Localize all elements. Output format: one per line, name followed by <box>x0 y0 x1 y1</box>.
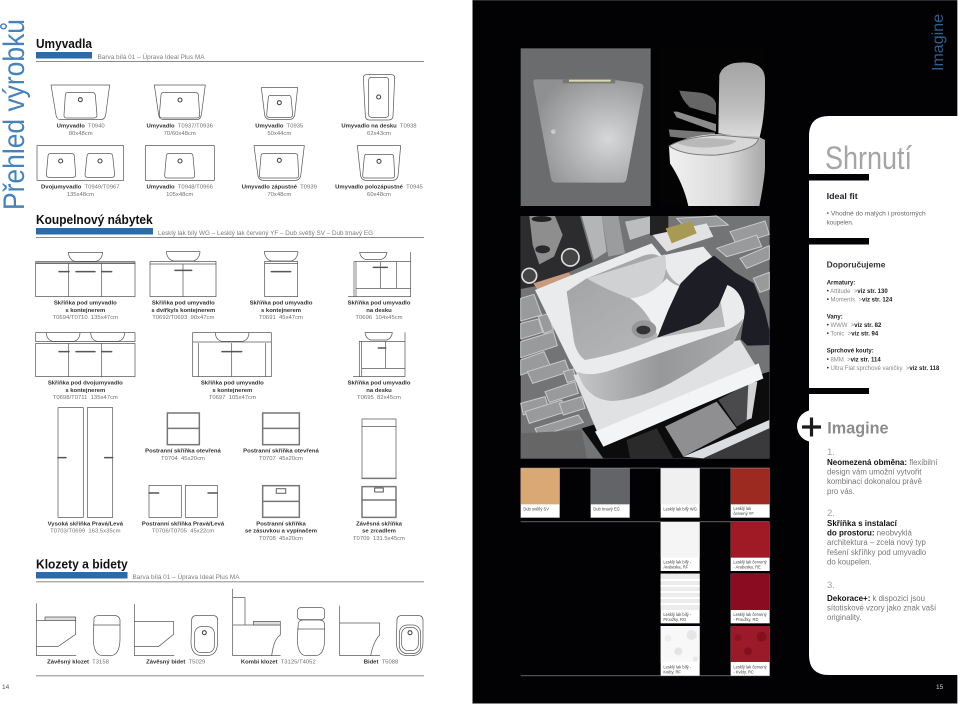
text block: Ideal fit <box>827 192 926 227</box>
text block: recommendations: • Ultra Flat sprchové vaničky >viz str. 118 <box>827 366 940 372</box>
swatch: white stripes: Proužky, RG <box>663 617 686 622</box>
photo: mirror <box>521 48 651 206</box>
vanity cabinet labels: s dvířky/s kontejnerem <box>151 308 215 314</box>
swatch: red flowers: Lesklý lak červený <box>733 664 768 669</box>
text block: feature 2: do koupelen. <box>827 557 872 566</box>
side and tall cabinet labels: T0707 45x20cm <box>259 456 303 462</box>
shelf <box>573 340 763 447</box>
vanity cabinet labels: s kontejnerem <box>65 388 105 394</box>
text block: recommendations: Armatury: <box>827 280 855 286</box>
text block: recommendations: Doporučujeme <box>827 260 886 269</box>
toilet T3158 <box>36 604 120 656</box>
drawer cabinet T0708 <box>263 486 299 517</box>
text block: recommendations <box>827 260 940 372</box>
section heading: Umyvadla <box>36 36 424 62</box>
swatch: white stripes: Lesklý lak bílý - <box>663 612 692 617</box>
photo: toilet with soft-close lid <box>660 48 765 206</box>
vanity cabinet labels: Skříňka pod umyvadlo <box>250 301 313 307</box>
vertical label: Imagine: Imagine <box>930 14 947 71</box>
basin labels: 50x44cm <box>267 131 291 137</box>
side and tall cabinet labels: Závěsná skříňka <box>356 521 403 527</box>
basin labels: Umyvadlo polozápustné T0945 <box>335 185 424 191</box>
right margin strip <box>958 0 960 705</box>
text block: recommendations: Sprchové kouty: <box>827 349 874 355</box>
basin labels: Umyvadlo T0948/T0966 <box>147 185 214 191</box>
swatch: Lesklý lak červený YF: červený YF <box>733 511 754 516</box>
text block: feature 1: 1. <box>827 447 835 458</box>
section heading: Umyvadla: Barva bílá 01 – Úprava Ideal Plus MA <box>98 52 205 61</box>
side cabinets T0706/T0705 <box>149 485 217 517</box>
basin labels: Umyvadlo zápustné T0939 <box>242 185 317 191</box>
vanity cabinet labels: T0697 105x47cm <box>209 395 256 401</box>
toilet labels: Kombi klozet T3125/T4052 <box>241 659 316 665</box>
text block: feature 1 <box>827 447 938 496</box>
basin labels: 70/60x48cm <box>164 131 196 137</box>
text block: feature 1: pro vás. <box>827 487 855 496</box>
text block: feature 2: řešení skříňky pod umyvadlo <box>827 548 927 557</box>
photo: washbasin on shelf <box>521 216 770 459</box>
text block: feature 2: 2. <box>827 508 835 519</box>
basin labels: 70x48cm <box>267 192 291 198</box>
basin labels: 80x48cm <box>69 131 93 137</box>
basin drawings <box>37 75 401 180</box>
text block: feature 3: Dekorace+: k dispozici jsou <box>827 594 925 603</box>
vanity cabinet labels: na desku <box>366 308 392 314</box>
cabinet T0696 <box>348 252 411 297</box>
section heading: Koupelnový nábytek: Lesklý lak bílý WG – Lesklý lak červený YF – Dub světlý SV – Dub tmavý EG <box>158 230 373 237</box>
vanity cabinet labels: T0696 104x45cm <box>355 315 403 321</box>
toilet labels <box>47 659 399 665</box>
mirror cabinet T0709 <box>362 419 396 517</box>
bidet T5088 <box>340 606 423 656</box>
text block: feature 2: Skříňka s instalací <box>827 519 898 528</box>
basin labels: 60x48cm <box>367 192 391 198</box>
basin T0948/T0966 <box>145 146 214 180</box>
side and tall cabinet labels <box>48 449 405 542</box>
swatch: Lesklý lak červený YF: Lesklý lak <box>733 506 752 511</box>
basin T0935 <box>261 88 298 119</box>
swatch: white arabesque <box>661 522 700 571</box>
right page black background <box>472 0 958 704</box>
heading: Shrnutí: Shrnutí <box>825 140 912 176</box>
vanity cabinet labels: T0698/T0711 135x47cm <box>53 395 118 401</box>
swatch: red arabesque: - Arabeska, RE <box>733 565 761 570</box>
side and tall cabinet labels: Postranní skříňka otevřená <box>145 449 222 455</box>
side and tall cabinet labels: T0706/T0705 45x22cm <box>152 529 214 535</box>
basin labels: 105x48cm <box>166 192 193 198</box>
text block: recommendations: • 8MM >viz str. 114 <box>827 357 881 363</box>
swatch: red stripes: Lesklý lak červený <box>733 612 768 617</box>
toilet labels: Bidet T5088 <box>364 659 399 665</box>
icon: plus badge <box>797 410 829 442</box>
vanity cabinet labels: Skříňka pod umyvadlo <box>201 381 264 387</box>
brick wall <box>521 216 769 437</box>
toilet labels: Závěsný klozet T3158 <box>47 659 110 665</box>
heading: Imagine: Imagine <box>827 419 888 437</box>
cabinet T0694/T0710 <box>36 252 135 297</box>
vanity cabinet labels: Skříňka pod dvojumyvadlo <box>48 381 123 387</box>
swatch: Dub tmavý EG <box>591 468 630 518</box>
section heading: Klozety a bidety: Klozety a bidety <box>36 556 128 571</box>
swatch: red arabesque: Lesklý lak červený <box>733 560 768 565</box>
swatch: Dub světlý SV <box>521 468 560 518</box>
swatch: Lesklý lak červený YF <box>731 468 770 518</box>
dark area below shelf <box>582 372 769 458</box>
section heading: Koupelnový nábytek <box>36 212 424 238</box>
swatch: white arabesque: Lesklý lak bílý - <box>663 560 692 565</box>
vanity cabinet labels: Skříňka pod umyvadlo <box>152 301 215 307</box>
vanity cabinet labels: Skříňka pod umyvadlo <box>348 301 411 307</box>
cabinet T0691 <box>264 252 298 297</box>
bottom rule left page <box>36 675 424 676</box>
side and tall cabinet drawings <box>36 408 423 656</box>
basin <box>535 243 744 401</box>
panel: summary <box>809 116 960 675</box>
text block: feature 2: do prostoru: neobvyklá <box>827 529 912 538</box>
text block: feature 1: kombinaci dokonalou právě <box>827 477 922 486</box>
tall cabinets <box>58 408 113 517</box>
vanity cabinet labels <box>48 301 411 401</box>
swatch: white stripes <box>661 574 700 623</box>
text block: feature 1: design vám umožní vytvořit <box>827 468 922 477</box>
side and tall cabinet labels: se zrcadlem <box>362 529 396 535</box>
text block: feature 2: architektura – zcela nový typ <box>827 538 926 547</box>
cabinet T0692/T0693 <box>150 252 216 297</box>
side and tall cabinet labels: Postranní skříňka <box>256 521 306 527</box>
page number 15: 15 <box>936 684 944 691</box>
basin T0938 <box>363 75 395 120</box>
basin T0945 <box>357 146 401 180</box>
vanity cabinet labels: s kontejnerem <box>65 308 105 314</box>
poster <box>521 216 593 289</box>
vanity cabinet labels: Skříňka pod umyvadlo <box>348 381 411 387</box>
vanity cabinet drawings <box>36 252 411 377</box>
section heading: Klozety a bidety <box>36 556 424 582</box>
swatch: red flowers <box>731 626 770 676</box>
swatch: white flowers: Lesklý lak bílý - <box>663 664 692 669</box>
swatch: Lesklý lak bílý WG <box>661 468 700 518</box>
basin labels <box>41 124 424 198</box>
text block: recommendations: • Attitude >viz str. 130 <box>827 289 888 295</box>
section heading: Klozety a bidety: Barva bílá 01 – Úprava Ideal Plus MA <box>132 572 240 581</box>
swatch: red stripes <box>731 574 770 623</box>
swatch: Dub světlý SV: Dub světlý SV <box>523 507 549 512</box>
text block: recommendations: Vany: <box>827 314 843 320</box>
vanity cabinet labels: Skříňka pod umyvadlo <box>54 301 117 307</box>
basin labels: Umyvadlo T0935 <box>255 124 304 130</box>
text block: recommendations: • WWW >viz str. 82 <box>827 323 882 329</box>
swatch: white flowers: Květy, RF <box>663 669 681 674</box>
text block: feature 3 <box>827 580 937 622</box>
text block: feature 3: sítotiskové vzory jako znak vaší <box>827 604 937 613</box>
open side cabinet T0707 <box>263 413 299 445</box>
text block: feature 3: originality. <box>827 613 862 622</box>
side and tall cabinet labels: T0708 45x20cm <box>259 536 303 542</box>
towel <box>657 256 769 346</box>
side and tall cabinet labels: T0709 131.5x45cm <box>353 536 405 542</box>
side and tall cabinet labels: se zásuvkou a vypínačem <box>245 529 317 535</box>
basin T0939 <box>254 146 304 180</box>
cabinet T0698/T0711 <box>36 333 135 377</box>
basin labels: Umyvadlo na desku T0938 <box>341 124 417 130</box>
page number 14: 14 <box>2 684 10 691</box>
bidet T5029 <box>134 604 218 656</box>
text block: feature 1: Neomezená obměna: flexibilní <box>827 458 938 467</box>
text block: recommendations: • Tonic >viz str. 94 <box>827 332 879 338</box>
basin labels: 62x43cm <box>367 131 391 137</box>
vanity cabinet labels: T0695 82x45cm <box>357 395 401 401</box>
text block: Ideal fit: • Vhodné do malých i prostorných <box>827 211 926 218</box>
side and tall cabinet labels: Vysoká skříňka Pravá/Levá <box>48 521 124 527</box>
text block: feature 2 <box>827 508 927 566</box>
knit pattern <box>521 430 587 458</box>
side and tall cabinet labels: T0703/T0699 163.5x35cm <box>50 529 121 535</box>
basin labels: Dvojumyvadlo T0949/T0967 <box>41 185 120 191</box>
text block: Ideal fit: Ideal fit <box>827 192 858 201</box>
vanity cabinet labels: s kontejnerem <box>212 388 252 394</box>
vanity cabinet labels: T0692/T0693 90x47cm <box>152 315 215 321</box>
side and tall cabinet labels: Postranní skříňka otevřená <box>243 449 320 455</box>
basin T0949/T0967 <box>37 146 124 180</box>
cabinet T0697 <box>193 333 271 377</box>
basin labels: 135x48cm <box>67 192 94 198</box>
swatch: Dub tmavý EG: Dub tmavý EG <box>593 507 620 512</box>
open side cabinet T0704 <box>167 413 199 445</box>
vanity cabinet labels: T0694/T0710 135x47cm <box>53 315 118 321</box>
vanity cabinet labels: s kontejnerem <box>261 308 301 314</box>
swatch: red flowers: - Květy, RC <box>733 669 754 674</box>
swatch: white arabesque: Arabeska, RF <box>663 565 689 570</box>
text block: feature 3: 3. <box>827 580 835 591</box>
section heading: Koupelnový nábytek: Koupelnový nábytek <box>36 212 153 227</box>
basin T0937/T0936 <box>154 85 205 120</box>
swatch: white flowers <box>661 626 700 676</box>
vanity cabinet labels: na desku <box>366 388 392 394</box>
swatch: red stripes: - Proužky, RD <box>733 617 758 622</box>
toilet T3125/T4052 <box>233 589 325 656</box>
text block: Ideal fit: koupelen. <box>827 220 854 227</box>
basin labels: Umyvadlo T0937/T0936 <box>147 124 214 130</box>
basin labels: Umyvadlo T0940 <box>57 124 105 130</box>
basin T0940 <box>51 85 110 120</box>
toilet labels: Závěsný bidet T5029 <box>146 659 205 665</box>
side and tall cabinet labels: T0704 45x20cm <box>161 456 205 462</box>
panel: finish swatches <box>521 468 770 676</box>
cabinet T0695 <box>353 333 405 377</box>
side and tall cabinet labels: Postranní skříňka Pravá/Levá <box>142 521 225 527</box>
section heading: Umyvadla: Umyvadla <box>36 36 93 51</box>
vanity cabinet labels: T0691 45x47cm <box>259 315 303 321</box>
swatch: Lesklý lak bílý WG: Lesklý lak bílý WG <box>663 507 697 512</box>
swatch: red arabesque <box>731 522 770 571</box>
divider tabs <box>809 174 869 394</box>
tap and soap <box>602 216 625 257</box>
text block: recommendations: • Moments >viz str. 124 <box>827 298 893 304</box>
